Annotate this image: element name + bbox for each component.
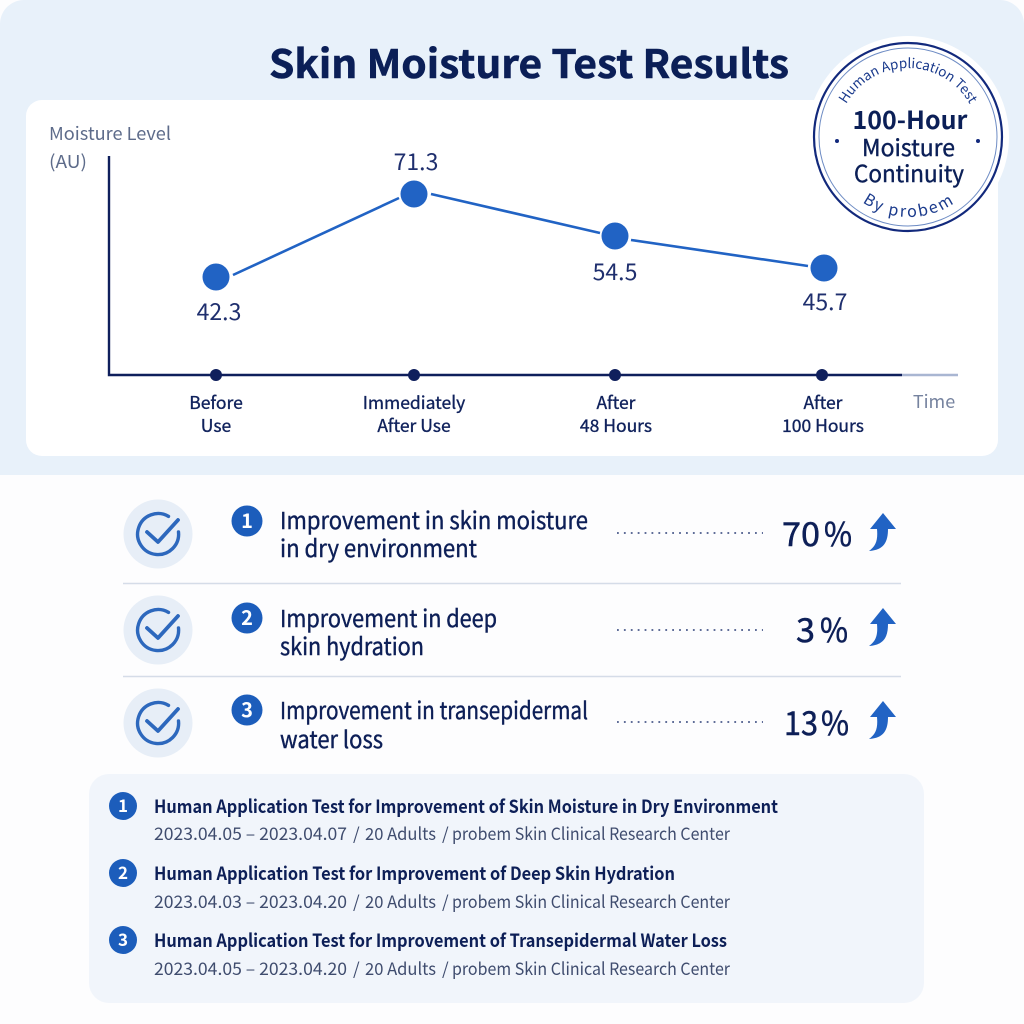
x axis labels [189, 390, 864, 438]
reference 2: Human Application Test for Improvement of Deep Skin Hydration [154, 860, 675, 886]
x axis labels: 100 Hours [782, 413, 864, 438]
x axis labels: After [597, 390, 636, 415]
reference 2: / [442, 888, 449, 913]
result row 3: % [821, 697, 849, 745]
data points [202, 180, 838, 290]
reference 3: / [353, 955, 360, 980]
badge: Human Application Test [838, 57, 977, 104]
reference 3 [109, 926, 730, 980]
x axis labels: Use [201, 413, 231, 438]
reference 2: 2023.04.03 – 2023.04.20 [154, 888, 347, 913]
time label: Time [913, 388, 955, 414]
result row 3: 13 [784, 697, 818, 745]
references panel [89, 774, 924, 1003]
badge: 100-Hour [853, 101, 968, 137]
result row 3: Improvement in transepidermal [280, 692, 588, 726]
x axis labels: After Use [377, 413, 451, 438]
data labels: 71.3 [394, 143, 438, 177]
reference 1: 2023.04.05 – 2023.04.07 [154, 820, 347, 845]
result row 1: Improvement in skin moisture [280, 502, 588, 536]
reference 3: 2023.04.05 – 2023.04.20 [154, 955, 347, 980]
header panel [0, 0, 1024, 475]
reference 1: probem Skin Clinical Research Center [452, 820, 730, 845]
data labels [197, 143, 847, 327]
result row 2: Improvement in deep [280, 600, 497, 634]
result row 2 [124, 596, 896, 664]
data labels: 45.7 [803, 283, 847, 317]
data labels: 42.3 [197, 293, 241, 327]
badge [812, 36, 1009, 232]
title: Skin Moisture Test Results [269, 34, 789, 90]
x axis labels: Immediately [363, 390, 465, 415]
result row 1: 1 [241, 505, 253, 534]
line series [233, 194, 808, 275]
badge: By probem [864, 193, 953, 218]
axes [109, 156, 958, 375]
reference 3: 3 [118, 926, 128, 951]
reference 3: probem Skin Clinical Research Center [452, 955, 730, 980]
reference 1: Human Application Test for Improvement of Skin Moisture in Dry Environment [154, 793, 778, 819]
reference 2: / [353, 888, 360, 913]
reference 2 [109, 859, 730, 913]
x axis labels: Before [189, 390, 243, 415]
result row 2: skin hydration [280, 628, 424, 662]
axis ticks [210, 369, 828, 381]
chart panel [26, 100, 998, 456]
reference 3: Human Application Test for Improvement of Transepidermal Water Loss [154, 927, 727, 953]
x axis labels: 48 Hours [580, 413, 652, 438]
reference 1: 1 [118, 792, 128, 817]
reference 2: 2 [118, 859, 128, 884]
reference 1 [109, 792, 778, 845]
result row 1 [124, 500, 896, 568]
result row 3: 3 [241, 694, 253, 723]
reference 1: / [442, 820, 449, 845]
reference 2: 20 Adults [365, 888, 436, 913]
x axis labels: After [804, 390, 843, 415]
reference 2: probem Skin Clinical Research Center [452, 888, 730, 913]
y axis label: (AU) [49, 148, 87, 174]
reference 3: 20 Adults [365, 955, 436, 980]
result row 2: % [820, 604, 848, 652]
badge: Continuity [854, 155, 964, 189]
y axis label [49, 120, 171, 174]
badge: Moisture [862, 129, 955, 163]
reference 3: / [442, 955, 449, 980]
reference 1: / [353, 820, 360, 845]
result row 2: 3 [796, 604, 815, 652]
reference 1: 20 Adults [365, 820, 436, 845]
result row 1: in dry environment [280, 530, 477, 564]
y axis label: Moisture Level [49, 120, 171, 146]
result row 3: water loss [280, 721, 383, 755]
data labels: 54.5 [593, 253, 637, 287]
result row 2: 2 [241, 602, 253, 631]
result row 1: 70 [782, 508, 820, 556]
result row 1: % [824, 508, 852, 556]
result row 3 [124, 688, 896, 758]
